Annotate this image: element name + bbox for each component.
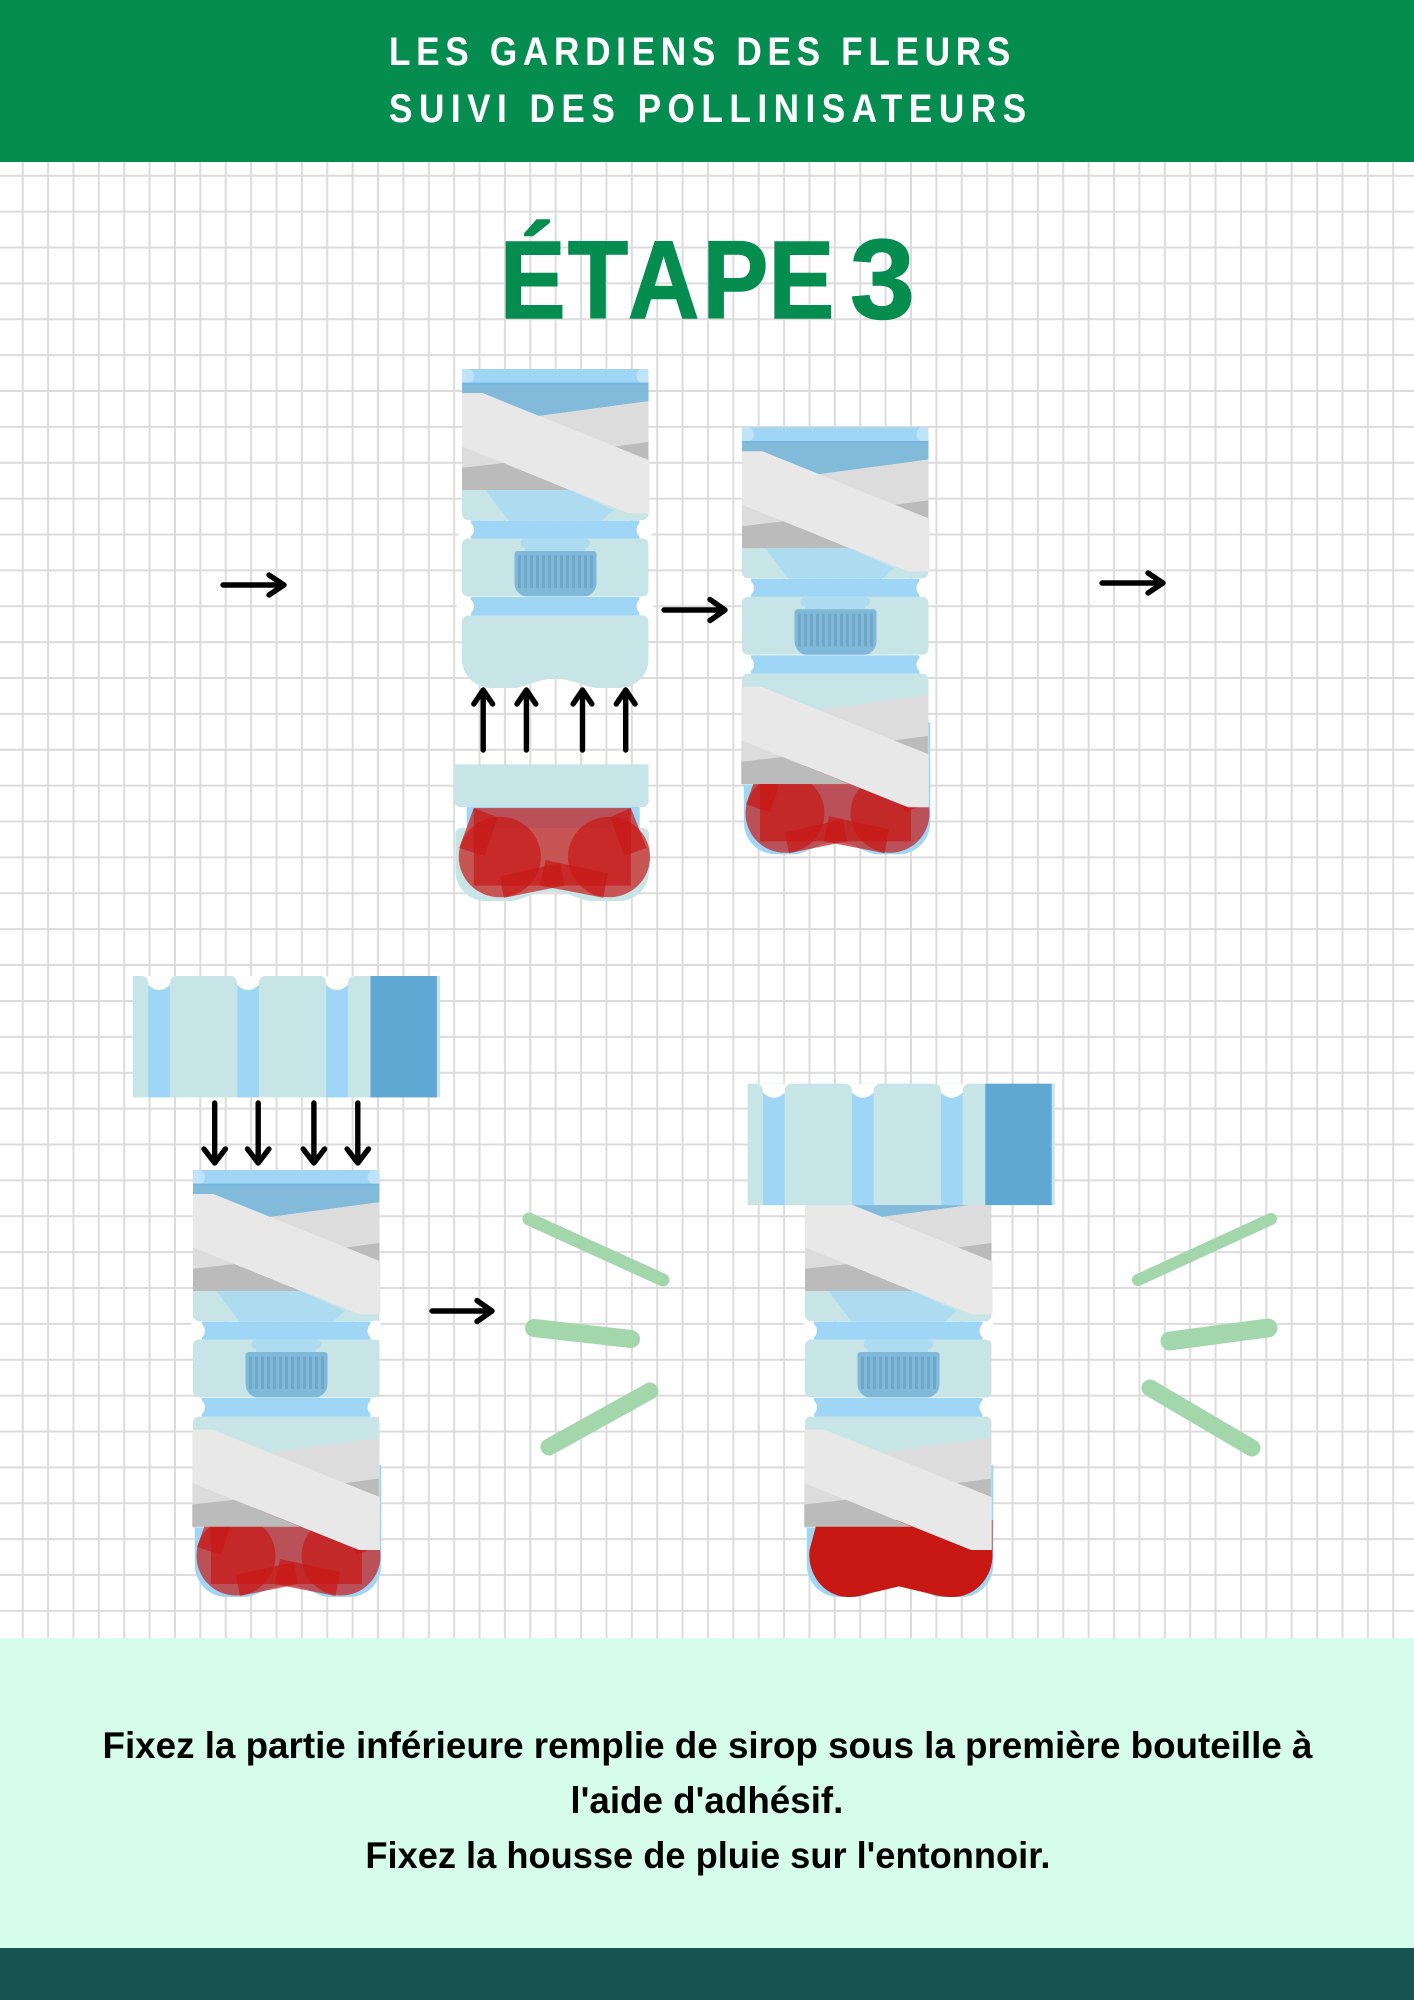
arrow: first step right	[223, 575, 284, 595]
panel: instructions	[0, 1638, 1414, 1948]
instruction line 2: l'aide d'adhésif.	[570, 1780, 843, 1821]
icon: green burst lines right	[1138, 1219, 1271, 1448]
arrows: four pointing up	[474, 690, 635, 750]
bottle: upper part with rounded base	[457, 369, 654, 688]
arrow: to finished trap	[432, 1300, 492, 1322]
icon: green burst lines left	[529, 1219, 663, 1447]
instruction line 1: Fixez la partie inférieure remplie de sirop sous la première bouteille à	[102, 1725, 1313, 1766]
bottle: finished trap with opaque syrup	[800, 1170, 996, 1597]
rain cover: fixed on funnel	[748, 1084, 1055, 1205]
bottle: assembled, left lower	[188, 1170, 384, 1597]
bottle base filled with red syrup	[455, 764, 650, 901]
rain cover: left	[133, 976, 440, 1097]
header title line 2: SUIVI DES POLLINISATEURS	[389, 86, 1026, 130]
arrow: to next step right	[1102, 573, 1163, 593]
heading: step 3: ÉTAPE	[500, 219, 834, 342]
arrow: to assembled bottle	[664, 600, 725, 620]
heading: step 3: 3	[850, 216, 915, 343]
header band	[0, 0, 1414, 162]
instruction line 3: Fixez la housse de pluie sur l'entonnoir.	[365, 1835, 1050, 1876]
arrows: four pointing down	[204, 1103, 368, 1163]
footer band	[0, 1948, 1414, 2000]
bottle: assembled with syrup base	[737, 427, 934, 854]
header title line 1: LES GARDIENS DES FLEURS	[389, 29, 1010, 73]
